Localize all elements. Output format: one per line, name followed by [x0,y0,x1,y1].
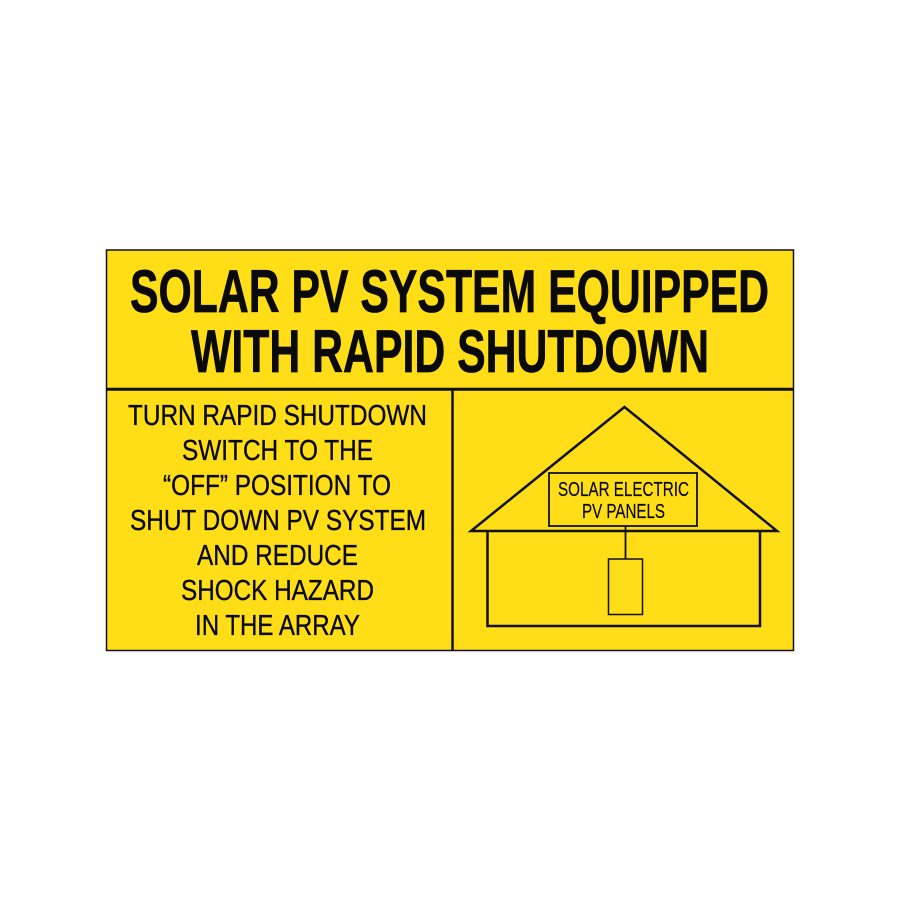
instruction text block: “OFF” POSITION TO [163,470,391,502]
instruction text block: IN THE ARRAY [195,610,360,642]
house diagram [471,407,777,626]
solar panels box: PV PANELS [582,501,665,523]
panel: yellow sign background [106,250,794,650]
instruction text block: SHOCK HAZARD [181,575,374,607]
heading [130,258,769,385]
instruction text block: SHUT DOWN PV SYSTEM [130,505,426,537]
instruction text block: SWITCH TO THE [182,435,373,467]
vertical divider [451,389,454,650]
icon: roof [471,407,777,531]
horizontal divider [106,388,793,391]
heading: WITH RAPID SHUTDOWN [191,318,709,385]
instruction text block: AND REDUCE [197,540,358,572]
instruction text block [128,400,427,642]
rapid shutdown switch box [608,559,642,614]
solar panels box [549,473,697,526]
icon: house walls [488,531,760,626]
solar panels box: SOLAR ELECTRIC [558,479,689,501]
connecting wire [624,526,626,559]
instruction text block: TURN RAPID SHUTDOWN [128,400,427,432]
